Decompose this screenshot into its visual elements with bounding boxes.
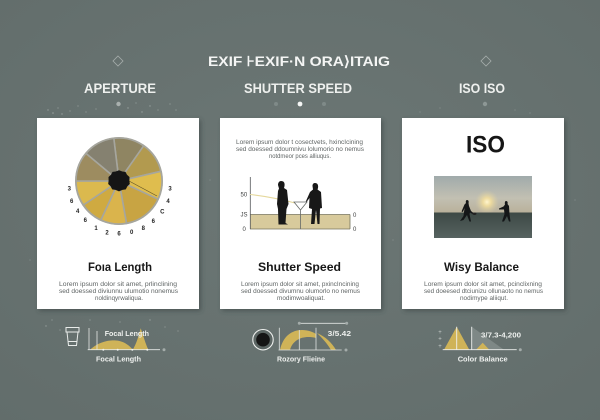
card description xyxy=(59,281,178,302)
chart: arcs xyxy=(278,322,348,352)
chart: focal length humps xyxy=(88,328,166,351)
axis labels xyxy=(240,192,357,233)
scale numbers: 1 xyxy=(94,226,98,232)
card description: sed doessed diviunnu ulumotio nonemus xyxy=(59,288,178,295)
scale numbers: C xyxy=(160,210,165,216)
axis labels: 0 xyxy=(353,213,357,219)
axis labels: 0 xyxy=(242,227,246,233)
left figure xyxy=(460,200,474,222)
heading: aperture: APERTURE xyxy=(84,81,156,96)
chart label: Focal Length xyxy=(105,329,149,338)
card intro text: notdmeor pces alliuqus. xyxy=(269,153,331,160)
card description xyxy=(424,281,543,302)
card intro text: Lorem ipsum dolor t cosectvets, hxincIcining xyxy=(236,139,364,146)
card description xyxy=(241,281,360,302)
chart value: 3/7.3-4,200 xyxy=(481,330,521,340)
card title: Foıa Length xyxy=(88,260,152,274)
card description: sed doessed divumnu olumorlo no nemus xyxy=(241,288,360,295)
scale numbers: 2 xyxy=(105,230,109,236)
legend: rotary xyxy=(253,322,351,364)
card description: sed doeesed dtciunizu ollunaoto no nemus xyxy=(424,288,543,295)
heading: iso: ISO ISO xyxy=(459,81,505,96)
left silhouette xyxy=(277,181,288,224)
panel: shutter speed card xyxy=(220,118,381,309)
right figure xyxy=(499,201,510,222)
legend: focal length xyxy=(66,328,166,364)
iso heading: ISO xyxy=(466,132,505,159)
chart: triangles xyxy=(438,327,522,351)
scale numbers: 6 xyxy=(152,219,156,225)
scale numbers: 0 xyxy=(130,230,134,236)
chart: aperture wheel xyxy=(68,137,172,238)
icon: right diamond xyxy=(481,56,491,66)
card description: Lorem ipsum dolor sit amet, pcinclixning xyxy=(424,281,543,288)
funnel mark xyxy=(294,202,307,229)
scale numbers xyxy=(68,186,172,238)
legend caption: Rozory Flieine xyxy=(277,354,325,364)
axis labels: 0 xyxy=(353,227,357,233)
scale numbers: 8 xyxy=(142,226,146,232)
legend caption: Focal Length xyxy=(96,354,141,364)
legend caption: Color Balance xyxy=(458,354,508,364)
card intro text: sed doessed ddoumnivu lolumorio no nemus xyxy=(236,146,364,153)
chart: shutter diagram xyxy=(240,177,357,233)
card description: Lorem ipsum dolor sit amet, pxincIncining xyxy=(241,281,360,288)
card description: nodimype aliiqut. xyxy=(460,295,508,302)
scale numbers: 4 xyxy=(76,209,80,215)
scale numbers: 4 xyxy=(166,199,170,205)
icon: cup xyxy=(66,328,79,346)
card title: Wisy Balance xyxy=(444,260,519,274)
indicator dots xyxy=(116,102,487,106)
card description: modimwoaliquat. xyxy=(277,295,325,302)
chart: triangles: + xyxy=(438,336,442,342)
photo: two figures at sunset xyxy=(434,176,532,238)
icon: left diamond xyxy=(113,56,123,66)
scale numbers: 3 xyxy=(68,186,72,192)
title: EXIF ⊦EXIF·N ORA⟩ITAIG xyxy=(208,53,390,69)
axis labels: 50 xyxy=(240,192,248,198)
icon: lens ring xyxy=(253,330,273,350)
chart: triangles: + xyxy=(438,344,442,350)
scale numbers: 3 xyxy=(168,186,172,192)
scale numbers: 6 xyxy=(117,232,121,238)
panel: iso card xyxy=(402,118,564,309)
aperture hole xyxy=(108,170,130,191)
card description: Lorem ipsum dolor sit amet, prlinclining xyxy=(59,281,178,288)
axis labels: JS xyxy=(240,212,248,218)
chart: triangles: + xyxy=(438,330,442,336)
scale numbers: 6 xyxy=(84,218,88,224)
right silhouette xyxy=(305,183,322,224)
legend: color balance xyxy=(438,327,522,364)
card title: Shutter Speed xyxy=(258,260,341,274)
scale numbers: 6 xyxy=(70,199,74,205)
card intro text xyxy=(236,139,364,160)
chart value: 3/5.42 xyxy=(328,329,351,338)
card description: noldinqyrwaliqua. xyxy=(95,295,143,302)
panel: aperture card xyxy=(37,118,199,309)
heading: shutter speed: SHUTTER SPEED xyxy=(244,81,352,96)
